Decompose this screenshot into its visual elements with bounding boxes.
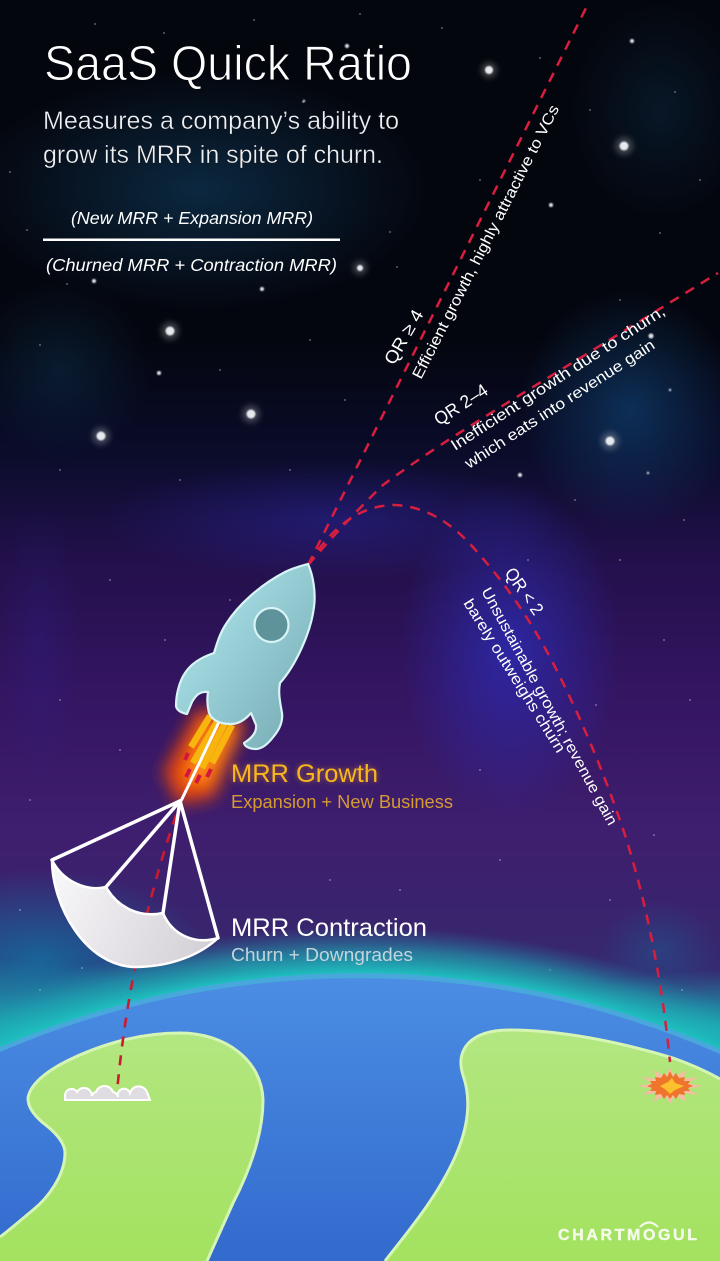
- formula: (New MRR + Expansion MRR): [71, 208, 313, 228]
- parachute canopy: [52, 860, 218, 967]
- planet atmosphere glow: [0, 920, 720, 1261]
- label: unsustainable growth: Unsustainable growth; revenue gain: [477, 585, 620, 828]
- label: inefficient growth: [448, 303, 669, 473]
- label: MRR Growth: Expansion + New Business: [231, 792, 453, 812]
- land: left island: [0, 1033, 263, 1261]
- rocket body: [176, 564, 315, 749]
- formula: (Churned MRR + Contraction MRR): [46, 255, 337, 275]
- label: MRR Contraction: MRR Contraction: [231, 914, 427, 942]
- logo: ChartMogul: CHARTMOGUL: [558, 1227, 697, 1244]
- parachute cords: [52, 801, 218, 938]
- land: right island: [385, 1030, 720, 1261]
- exhaust sparks: [185, 753, 211, 783]
- label: QR 2-4: QR 2–4: [430, 380, 491, 429]
- icon: landing cloud: [65, 1086, 150, 1100]
- label: MRR Growth: MRR Growth: [231, 760, 378, 788]
- flame glow: [163, 708, 246, 804]
- rocket with flame: [163, 564, 315, 804]
- subtitle: [43, 107, 399, 169]
- flame bars: [191, 716, 232, 768]
- planet earth: [0, 973, 720, 1261]
- trajectory: QR 2-4: [308, 273, 718, 565]
- label: QR >= 4: QR ≥ 4: [380, 306, 427, 368]
- label: QR under 2: QR < 2: [501, 564, 548, 619]
- rocket window: [254, 608, 288, 642]
- star field: [9, 13, 701, 991]
- label: inefficient growth: which eats into revenue gain: [461, 337, 658, 473]
- subtitle: Measures a company’s ability to: [43, 107, 399, 135]
- trajectory: QR >= 4: [308, 2, 589, 565]
- label: efficient growth: Efficient growth, highly attractive to VCs: [409, 102, 563, 382]
- subtitle: grow its MRR in spite of churn.: [43, 141, 383, 169]
- trajectory: descent to landing: [117, 815, 176, 1092]
- label: MRR Growth: [231, 760, 453, 812]
- formula: [43, 208, 340, 275]
- label: MRR Contraction: Churn + Downgrades: [231, 945, 413, 965]
- label: inefficient growth: Inefficient growth due to churn,: [448, 303, 669, 454]
- title: SaaS Quick Ratio: [44, 37, 412, 91]
- label: unsustainable growth: barely outweighs churn: [460, 596, 568, 756]
- label: MRR Contraction: [231, 914, 427, 965]
- label: MRR Growth: MRR Growth: [231, 760, 378, 788]
- icon: crash explosion: [637, 1068, 703, 1104]
- parachute: [52, 801, 218, 967]
- trajectory: QR under 2: [308, 505, 670, 1062]
- tether: [181, 722, 219, 801]
